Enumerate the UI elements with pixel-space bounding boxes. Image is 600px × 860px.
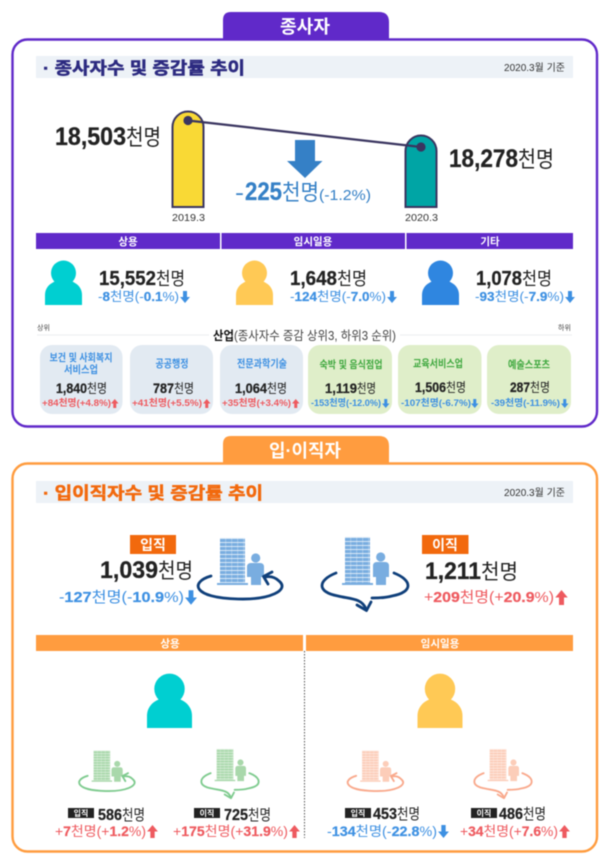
card: 전문과학기술: 전문과학기술 [237, 357, 287, 370]
stat: 임시일용 입직 [327, 806, 449, 839]
stat: 임시일용 입직: -134천명(-22.8%) [327, 824, 437, 839]
stat: 이직: +209천명(+20.9%) [424, 589, 554, 606]
icon: 이직 건물과 사람 [322, 537, 408, 610]
card: 보건 및 사회복지 서비스업: 보건 및 사회복지 [50, 351, 112, 364]
card: 예술스포츠 [487, 345, 571, 414]
header band: 상용, 임시일용: 임시일용 [421, 637, 460, 650]
stat: 임시일용: -124천명(-7.0%) [290, 289, 386, 304]
chart: 종사자수 변화 막대: 천명 [518, 147, 554, 172]
stat: 입직: 천명 [158, 560, 193, 583]
heading: 산업: 하위 [558, 323, 571, 332]
header band: 종사상 지위 [36, 233, 573, 249]
header band: 종사상 지위: 기타 [480, 235, 500, 248]
stat: 임시일용 이직: 천명 [523, 806, 546, 823]
header band: 상용, 임시일용: 상용 [160, 637, 180, 650]
card: 전문과학기술 [220, 345, 303, 414]
card: 숙박 및 음식점업: 숙박 및 음식점업 [320, 358, 382, 371]
card: 보건 및 사회복지 서비스업: +84천명(+4.8%) [42, 397, 111, 409]
stat: 상용 이직 [173, 807, 300, 839]
chart: 종사자수 변화 막대: 천명 [126, 125, 161, 150]
card: 교육서비스업: -107천명(-6.7%) [401, 397, 471, 409]
text: 전체 증감: - [235, 180, 244, 205]
card: 교육서비스업 [398, 345, 482, 414]
stat: 상용 입직: 입직 [74, 808, 88, 818]
stat: 임시일용 이직: 486 [499, 806, 523, 823]
heading: 입이직자수 추이 [36, 481, 573, 503]
icon: 입직 건물과 사람 [198, 538, 282, 599]
heading: 입이직자수 추이: · 입이직자수 및 증감률 추이 [43, 484, 263, 503]
card: 보건 및 사회복지 서비스업: 서비스업 [64, 363, 98, 376]
text: 전체 증감: 225 [245, 178, 282, 206]
stat: 입직: 입직 [140, 537, 166, 553]
stat: 임시일용 입직: 453 [373, 806, 397, 823]
card: 공공행정: 천명 [174, 381, 194, 396]
icon: 임시일용 이직 [474, 749, 532, 798]
stat: 입직: -127천명(-10.9%) [59, 589, 184, 606]
stat: 임시일용 입직: 입직 [351, 808, 365, 818]
stat: 상용: 15,552 [99, 268, 156, 290]
card: 보건 및 사회복지 서비스업: 1,840 [56, 380, 87, 396]
header band: 종사상 지위: 임시일용 [294, 235, 333, 248]
text: 전체 증감: (-1.2%) [319, 187, 371, 204]
stat: 상용 이직: 천명 [248, 807, 271, 824]
tab: 입이직자: 입·이직자 [269, 441, 341, 461]
chart: 종사자수 변화 막대: 18,503 [55, 123, 126, 151]
stat: 임시일용 이직 [460, 806, 570, 839]
card: 공공행정: +41천명(+5.5%) [132, 397, 202, 409]
heading: 입이직자수 추이: 2020.3월 기준 [504, 487, 565, 499]
stat: 상용: 천명 [156, 269, 185, 289]
stat: 입직 [59, 535, 197, 606]
stat: 상용: -8천명(-0.1%) [98, 289, 179, 304]
stat: 임시일용: 천명 [337, 269, 367, 289]
heading: 산업: 상위 [37, 323, 50, 332]
stat: 임시일용 이직: +34천명(+7.6%) [460, 824, 558, 839]
stat: 상용 입직: 586 [98, 807, 122, 824]
heading: 산업 [37, 323, 572, 343]
text: 전체 증감: 천명 [282, 180, 319, 205]
card: 전문과학기술: +35천명(+3.4%) [222, 397, 291, 409]
icon: 상용 사람 [147, 674, 192, 728]
tab: 입이직자 [223, 436, 389, 464]
card: 예술스포츠: 예술스포츠 [508, 358, 550, 371]
card: 공공행정: 공공행정 [156, 357, 188, 370]
tab: 종사자 [223, 12, 389, 40]
chart: 종사자수 변화 막대: 2019.3 [172, 212, 205, 224]
stat: 임시일용 [236, 260, 397, 305]
heading: 종사자수 추이: 2020.3월 기준 [504, 62, 565, 74]
stat: 상용 이직: 725 [224, 807, 248, 824]
card: 공공행정 [130, 345, 213, 414]
card: 전문과학기술: 1,064 [235, 380, 267, 396]
heading: 산업: 산업(종사자수 증감 상위3, 하위3 순위) [213, 329, 396, 343]
card: 예술스포츠: -39천명(-11.9%) [491, 397, 560, 409]
stat: 임시일용 이직: 이직 [477, 808, 491, 818]
card: 교육서비스업: 천명 [446, 380, 466, 395]
chart: 종사자수 변화 막대 [55, 112, 554, 224]
stat: 상용 이직: 이직 [200, 808, 214, 818]
stat: 입직: 1,039 [100, 557, 158, 584]
card: 보건 및 사회복지 서비스업 [40, 345, 122, 414]
card: 전문과학기술: 천명 [267, 381, 287, 396]
stat: 상용 이직: +175천명(+31.9%) [173, 824, 288, 839]
panel: 입이직자 [12, 464, 597, 852]
card: 교육서비스업: 1,506 [415, 379, 446, 395]
stat: 이직: 이직 [432, 537, 458, 553]
stat: 상용 [45, 260, 190, 305]
panel: 종사자 [12, 40, 597, 426]
header band: 상용, 임시일용 [36, 635, 573, 651]
chart: 종사자수 변화 막대: 18,278 [449, 145, 518, 173]
heading: 종사자수 추이: · 종사자수 및 증감률 추이 [43, 59, 245, 78]
card: 교육서비스업: 교육서비스업 [413, 357, 463, 370]
stat: 이직: 천명 [481, 561, 518, 584]
icon: 임시일용 사람 [418, 674, 462, 728]
stat: 상용 입직: 천명 [122, 807, 145, 824]
stat: 이직: 1,211 [425, 558, 481, 585]
stat: 기타: 1,078 [476, 268, 522, 290]
chart: 종사자수 변화 막대: 2020.3 [405, 212, 438, 224]
card: 숙박 및 음식점업 [308, 345, 392, 414]
tab: 종사자: 종사자 [280, 17, 330, 37]
stat: 임시일용: 1,648 [290, 268, 337, 290]
card: 보건 및 사회복지 서비스업: 천명 [87, 381, 107, 396]
stat: 임시일용 입직: 천명 [397, 806, 420, 823]
icon: 상용 입직 [79, 751, 135, 791]
card: 예술스포츠: 287 [510, 379, 530, 395]
header band: 종사상 지위: 상용 [118, 235, 138, 248]
icon: 임시일용 입직 [348, 751, 403, 791]
card: 숙박 및 음식점업: -153천명(-12.0%) [311, 397, 381, 409]
stat: 이직 [422, 535, 568, 606]
heading: 종사자수 추이 [36, 56, 573, 78]
card: 공공행정: 787 [153, 380, 174, 396]
icon: 상용 이직 [201, 749, 259, 798]
stat: 상용 입직: +7천명(+1.2%) [55, 824, 146, 839]
card: 예술스포츠: 천명 [530, 380, 550, 395]
stat: 기타 [422, 260, 575, 305]
stat: 기타: -93천명(-7.9%) [475, 289, 564, 304]
card: 숙박 및 음식점업: 천명 [357, 381, 376, 396]
icon: 감소 화살표 [287, 140, 322, 178]
card: 숙박 및 음식점업: 1,119 [325, 380, 357, 396]
stat: 상용 입직 [55, 807, 158, 839]
stat: 기타: 천명 [522, 269, 552, 289]
